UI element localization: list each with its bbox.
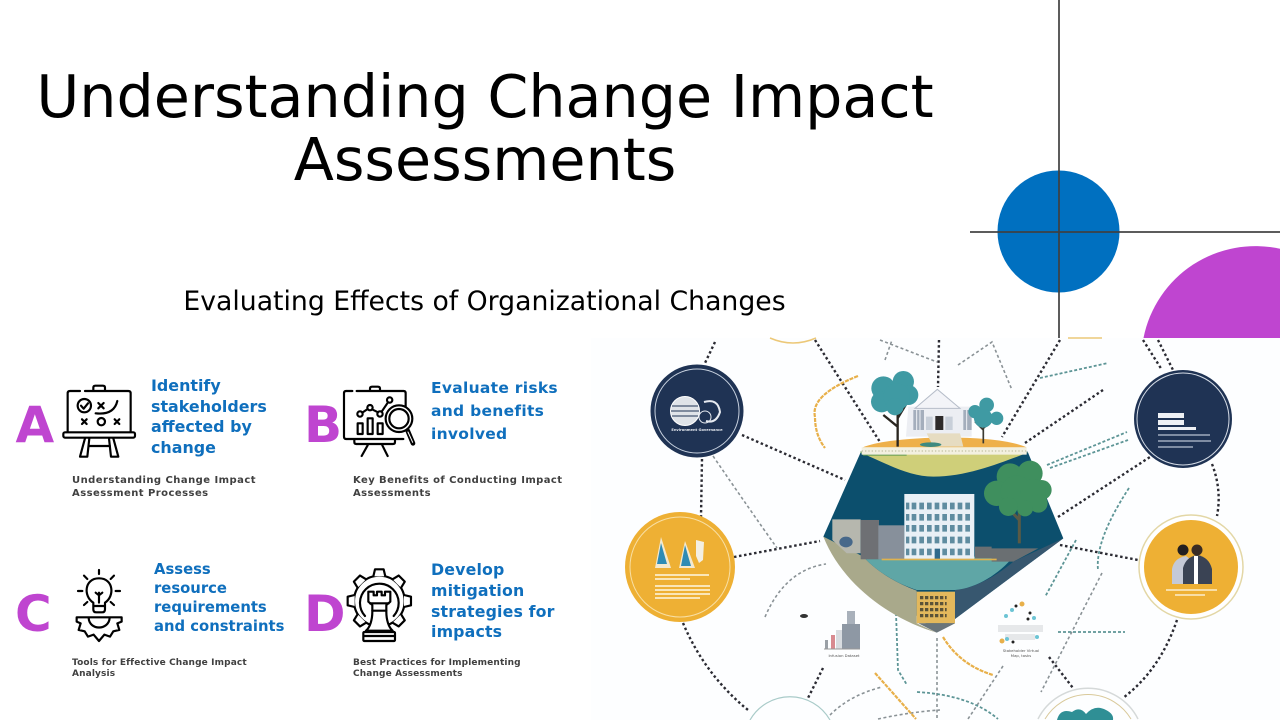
small marker <box>800 614 808 618</box>
slate band <box>937 538 1063 633</box>
mini chart: infusion dataset: Infusion Dataset <box>828 653 860 658</box>
panel: item B <box>304 379 562 499</box>
tree right <box>975 420 993 443</box>
khaki band <box>823 537 937 633</box>
heading A: affected by <box>151 417 252 436</box>
letter C: C <box>15 585 52 643</box>
connector lines <box>683 338 1219 719</box>
heading B: involved <box>431 425 507 443</box>
heading D: impacts <box>431 622 502 641</box>
heading D: Develop <box>431 560 504 579</box>
tree left <box>883 400 907 447</box>
decorative shape: purple circle <box>1144 246 1280 338</box>
icon: gear with chess rook <box>348 569 411 641</box>
heading C: resource <box>154 580 227 597</box>
mini diagram: stakeholder network <box>998 602 1043 658</box>
caption D: Change Assessments <box>353 669 463 679</box>
green tree <box>1003 497 1037 543</box>
node: bottom right circle <box>1038 688 1138 720</box>
top lawn <box>860 453 1028 477</box>
caption C: Analysis <box>72 669 115 679</box>
icon: strategy board <box>63 386 135 457</box>
caption D: Best Practices for Implementing <box>353 658 521 668</box>
node: navy circle right <box>1134 370 1232 468</box>
side buildings <box>832 519 861 553</box>
node: navy circle left <box>650 364 744 458</box>
node: bottom left circle <box>750 697 830 720</box>
icon: presentation chart with magnifier <box>344 387 413 456</box>
heading B: and benefits <box>431 402 544 420</box>
caption B: Assessments <box>353 488 431 499</box>
letter D: D <box>304 585 346 643</box>
panel: item A <box>16 376 267 499</box>
decorative shape: blue circle <box>998 170 1120 292</box>
pentagon base <box>823 452 1063 633</box>
teal floor <box>863 557 1013 590</box>
heading C: and constraints <box>154 618 285 635</box>
panel: item C <box>15 561 285 679</box>
white house <box>906 407 972 437</box>
heading D: strategies for <box>431 602 555 621</box>
caption A: Understanding Change Impact <box>72 475 256 486</box>
yellow building <box>917 592 955 623</box>
decorative crosshair lines <box>970 0 1280 338</box>
central illustration <box>823 371 1063 633</box>
icon: light bulb on gear <box>77 570 122 641</box>
orange ground <box>863 437 1027 447</box>
panel: network illustration <box>591 338 1280 720</box>
node: navy circle left: Environment Governance <box>671 428 723 432</box>
title: Assessments <box>294 126 676 194</box>
mini chart: infusion dataset <box>824 611 860 658</box>
mini diagram: stakeholder network: Stakeholder Virtual <box>1003 648 1039 653</box>
heading A: change <box>151 438 216 457</box>
letter A: A <box>16 396 54 454</box>
heading C: requirements <box>154 599 267 616</box>
title: Understanding Change Impact <box>36 63 934 131</box>
heading A: stakeholders <box>151 397 267 416</box>
caption C: Tools for Effective Change Impact <box>72 658 247 668</box>
caption B: Key Benefits of Conducting Impact <box>353 475 562 486</box>
node: orange circle left <box>625 512 735 622</box>
subtitle: Evaluating Effects of Organizational Changes <box>183 286 786 317</box>
heading D: mitigation <box>431 581 524 600</box>
heading C: Assess <box>154 561 211 578</box>
letter B: B <box>304 396 342 454</box>
panel: item D <box>304 560 555 679</box>
main building <box>904 494 974 559</box>
mini diagram: stakeholder network: Map, tasks <box>1011 653 1031 658</box>
node: orange circle right <box>1139 515 1243 619</box>
heading B: Evaluate risks <box>431 379 558 397</box>
heading A: Identify <box>151 376 221 395</box>
caption A: Assessment Processes <box>72 488 209 499</box>
